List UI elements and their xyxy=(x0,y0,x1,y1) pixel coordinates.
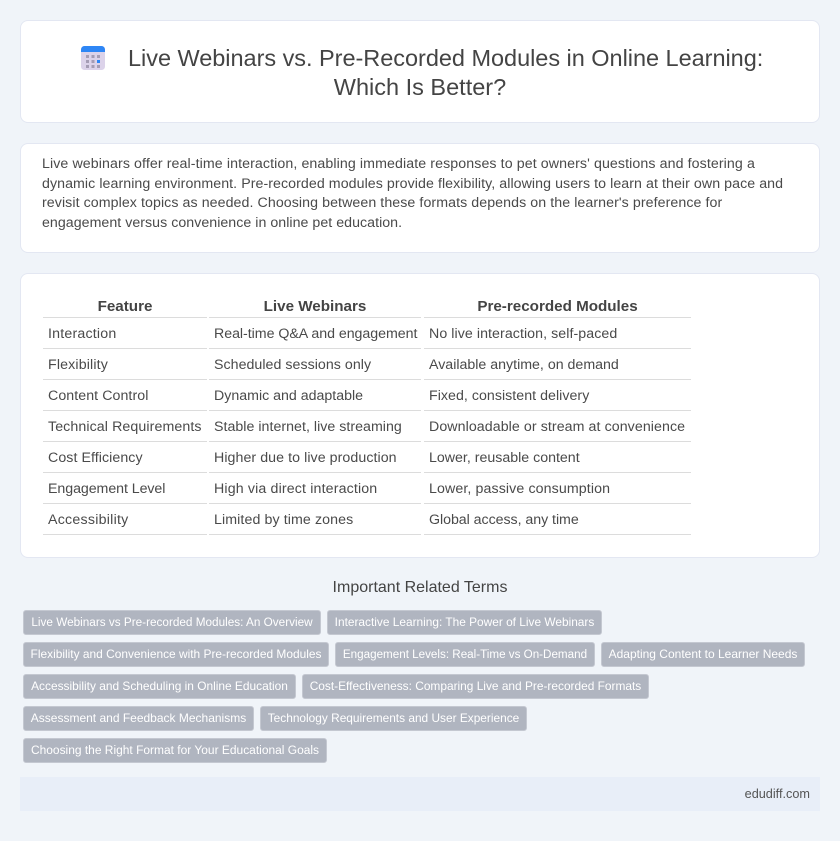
table: comparison: Interaction xyxy=(48,326,116,342)
text block: introduction xyxy=(42,156,783,230)
table: comparison: Pre-recorded Modules xyxy=(477,298,638,315)
tag list: related terms xyxy=(23,610,805,763)
table: comparison: Limited by time zones xyxy=(214,512,353,528)
text block: introduction: revisit complex topics as needed. Choosing between these formats depends on the learner's preference for xyxy=(42,195,722,211)
table: comparison xyxy=(43,298,691,535)
table: comparison: Lower, reusable content xyxy=(429,450,580,466)
title: Live Webinars vs. Pre-Recorded Modules in Online Learning: xyxy=(128,45,763,71)
table: comparison: Scheduled sessions only xyxy=(214,357,371,373)
table: comparison: Higher due to live production xyxy=(214,450,397,466)
panel: comparison table xyxy=(20,273,820,558)
table: comparison: Live Webinars xyxy=(264,298,366,315)
tag list: related terms: Engagement Levels: Real-Time vs On-Demand xyxy=(343,648,587,661)
table: comparison: Flexibility xyxy=(48,357,108,373)
table: comparison: Dynamic and adaptable xyxy=(214,388,363,404)
table: comparison: Downloadable or stream at convenience xyxy=(429,419,685,435)
heading: important related terms: Important Related Terms xyxy=(333,579,507,596)
panel: introduction xyxy=(20,143,820,253)
footer bar xyxy=(20,777,820,811)
tag list: related terms: Flexibility and Convenience with Pre-recorded Modules xyxy=(31,647,321,661)
table: comparison: No live interaction, self-paced xyxy=(429,326,617,342)
table: comparison: Feature xyxy=(98,298,152,315)
table: comparison: Lower, passive consumption xyxy=(429,481,610,497)
table: comparison: Engagement Level xyxy=(48,481,165,497)
footer: site name: edudiff.com xyxy=(745,787,810,801)
table: comparison: High via direct interaction xyxy=(214,481,377,497)
table: comparison: Technical Requirements xyxy=(48,419,202,435)
text block: introduction: dynamic learning environment. Pre-recorded modules provide flexibility, allowing users to learn at their own pace and xyxy=(42,176,783,192)
tag list: related terms: Live Webinars vs Pre-recorded Modules: An Overview xyxy=(31,616,313,629)
text block: introduction: Live webinars offer real-time interaction, enabling immediate responses to pet owners' questions and fostering a xyxy=(42,156,755,172)
table: comparison: Available anytime, on demand xyxy=(429,357,619,373)
table: comparison: Global access, any time xyxy=(429,512,579,528)
table: comparison: Real-time Q&A and engagement xyxy=(214,326,417,342)
table: comparison: Accessibility xyxy=(48,512,129,528)
tag list: related terms: Cost-Effectiveness: Comparing Live and Pre-recorded Formats xyxy=(310,679,641,693)
panel: header xyxy=(20,20,820,123)
table: comparison: Cost Efficiency xyxy=(48,450,143,466)
table: comparison: Stable internet, live streaming xyxy=(214,419,402,435)
tag list: related terms: Adapting Content to Learner Needs xyxy=(609,647,797,661)
tag list: related terms: Interactive Learning: The Power of Live Webinars xyxy=(335,615,594,629)
tag list: related terms: Technology Requirements and User Experience xyxy=(268,711,519,725)
table: comparison: Fixed, consistent delivery xyxy=(429,388,589,404)
icon: calendar xyxy=(81,46,105,70)
title xyxy=(128,45,763,100)
tag list: related terms: Accessibility and Scheduling in Online Education xyxy=(31,679,288,693)
text block: introduction: engagement versus convenience in online pet education. xyxy=(42,214,402,230)
title: Which Is Better? xyxy=(334,74,506,100)
tag list: related terms: Choosing the Right Format for Your Educational Goals xyxy=(31,743,319,757)
table: comparison: Content Control xyxy=(48,388,148,404)
tag list: related terms: Assessment and Feedback Mechanisms xyxy=(31,711,246,725)
